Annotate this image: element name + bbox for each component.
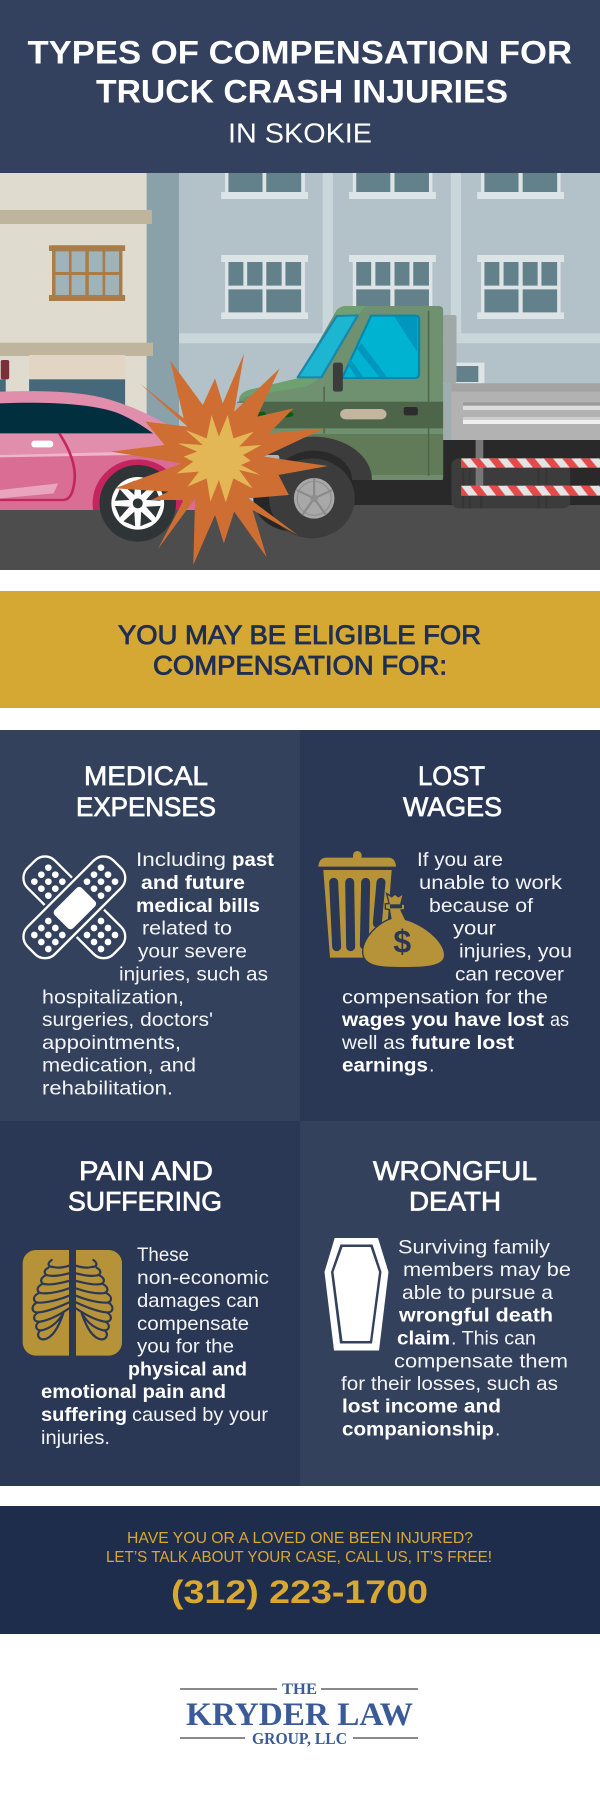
- body text: pain and suffering: compensate: [137, 1313, 249, 1335]
- banner heading: COMPENSATION FOR:: [153, 650, 447, 680]
- body text: lost wages: wages you have lost: [341, 1009, 545, 1031]
- icon: coffin: [324, 1238, 388, 1350]
- heading: medical expenses: EXPENSES: [76, 792, 216, 822]
- body text: lost wages: If you are: [417, 849, 503, 871]
- body text: pain and suffering: suffering: [41, 1404, 127, 1426]
- body text: lost wages: [341, 849, 572, 1077]
- body text: medical expenses: hospitalization,: [42, 986, 184, 1008]
- title: TYPES OF COMPENSATION FOR: [28, 34, 572, 70]
- icon: trash can and money bag: $: [393, 923, 411, 959]
- header banner: [0, 0, 600, 173]
- buildings: [0, 170, 600, 507]
- eligibility banner: [0, 591, 600, 708]
- body text: pain and suffering: damages can: [137, 1290, 259, 1312]
- explosion burst: [111, 353, 328, 565]
- body text: lost wages: unable to work: [419, 872, 562, 894]
- body text: lost wages: injuries, you: [459, 941, 572, 963]
- icon: trash can and money bag: [318, 851, 444, 967]
- body text: lost wages: as: [550, 1009, 569, 1031]
- body text: medical expenses: and future: [141, 872, 245, 894]
- title: TRUCK CRASH INJURIES: [96, 73, 508, 109]
- title: [28, 34, 572, 109]
- phone number: (312) 223-1700: [171, 1574, 428, 1610]
- body text: medical expenses: medical bills: [136, 895, 260, 917]
- heading: pain and suffering: SUFFERING: [68, 1187, 222, 1217]
- body text: medical expenses: surgeries, doctors': [42, 1009, 213, 1031]
- body text: medical expenses: Including: [136, 849, 226, 871]
- body text: medical expenses: medication, and: [42, 1055, 196, 1077]
- panel: wrongful death: [300, 1121, 600, 1486]
- body text: medical expenses: appointments,: [42, 1032, 181, 1054]
- body text: pain and suffering: These: [137, 1244, 189, 1266]
- heading: lost wages: WAGES: [403, 792, 502, 822]
- subtitle: IN SKOKIE: [228, 117, 372, 148]
- heading: wrongful death: WRONGFUL: [373, 1156, 537, 1186]
- panel: lost wages: [300, 730, 600, 1121]
- body text: wrongful death: able to pursue a: [402, 1282, 553, 1304]
- body text: lost wages: earnings: [342, 1055, 428, 1077]
- body text: wrongful death: for their losses, such as: [341, 1373, 558, 1395]
- truck: [235, 306, 600, 538]
- heading: wrongful death: [373, 1156, 537, 1217]
- heading: wrongful death: DEATH: [409, 1187, 501, 1217]
- heading: pain and suffering: PAIN AND: [79, 1156, 213, 1186]
- body text: wrongful death: .: [495, 1419, 500, 1441]
- body text: pain and suffering: [41, 1244, 269, 1449]
- body text: lost wages: .: [429, 1055, 434, 1077]
- car: [0, 391, 203, 547]
- body text: wrongful death: Surviving family: [398, 1236, 550, 1258]
- body text: wrongful death: [341, 1236, 571, 1441]
- body text: lost wages: because of: [429, 895, 534, 917]
- body text: wrongful death: wrongful death: [398, 1305, 553, 1327]
- heading: lost wages: [403, 761, 502, 822]
- call to action text: [106, 1530, 492, 1566]
- body text: medical expenses: [42, 849, 275, 1099]
- logo: The Kryder Law Group, LLC: KRYDER LAW: [186, 1697, 413, 1733]
- logo: The Kryder Law Group, LLC: [180, 1681, 418, 1748]
- body text: medical expenses: rehabilitation.: [42, 1077, 173, 1099]
- body text: wrongful death: claim: [397, 1328, 450, 1350]
- heading: medical expenses: MEDICAL: [84, 761, 208, 791]
- body text: lost wages: future lost: [411, 1032, 515, 1054]
- body text: medical expenses: related to: [142, 918, 232, 940]
- call to action band: [0, 1506, 600, 1634]
- call to action text: LET’S TALK ABOUT YOUR CASE, CALL US, IT’S FREE!: [106, 1549, 492, 1566]
- heading: medical expenses: [76, 761, 216, 822]
- body text: medical expenses: past: [232, 849, 275, 871]
- body text: pain and suffering: non-economic: [137, 1267, 269, 1289]
- body text: pain and suffering: injuries.: [41, 1427, 110, 1449]
- banner heading: YOU MAY BE ELIGIBLE FOR: [118, 620, 481, 650]
- icon: bandages: [18, 851, 131, 964]
- call to action text: HAVE YOU OR A LOVED ONE BEEN INJURED?: [127, 1530, 473, 1547]
- body text: pain and suffering: caused by your: [132, 1404, 269, 1426]
- banner heading: [118, 620, 481, 680]
- body text: wrongful death: . This can: [451, 1328, 536, 1350]
- icon: rib cage: [23, 1248, 122, 1358]
- panel: pain and suffering: [0, 1121, 300, 1486]
- heading: pain and suffering: [68, 1156, 222, 1217]
- body text: wrongful death: companionship: [342, 1419, 494, 1441]
- illustration: truck and car collision: [0, 170, 600, 572]
- panel: medical expenses: [0, 730, 300, 1121]
- body text: lost wages: can recover: [455, 963, 565, 985]
- body text: pain and suffering: you for the: [137, 1336, 234, 1358]
- body text: wrongful death: members may be: [403, 1259, 571, 1281]
- body text: lost wages: your: [453, 918, 497, 940]
- body text: wrongful death: compensate them: [394, 1350, 568, 1372]
- body text: medical expenses: injuries, such as: [119, 963, 268, 985]
- body text: lost wages: well as: [341, 1032, 405, 1054]
- body text: pain and suffering: emotional pain and: [41, 1381, 226, 1403]
- body text: pain and suffering: physical and: [128, 1358, 247, 1380]
- logo: The Kryder Law Group, LLC: THE: [282, 1681, 317, 1698]
- road: [0, 505, 600, 572]
- body text: wrongful death: lost income and: [342, 1396, 501, 1418]
- body text: medical expenses: your severe: [138, 941, 247, 963]
- logo: The Kryder Law Group, LLC: GROUP, LLC: [252, 1729, 347, 1748]
- heading: lost wages: LOST: [418, 761, 485, 791]
- body text: lost wages: compensation for the: [342, 986, 548, 1008]
